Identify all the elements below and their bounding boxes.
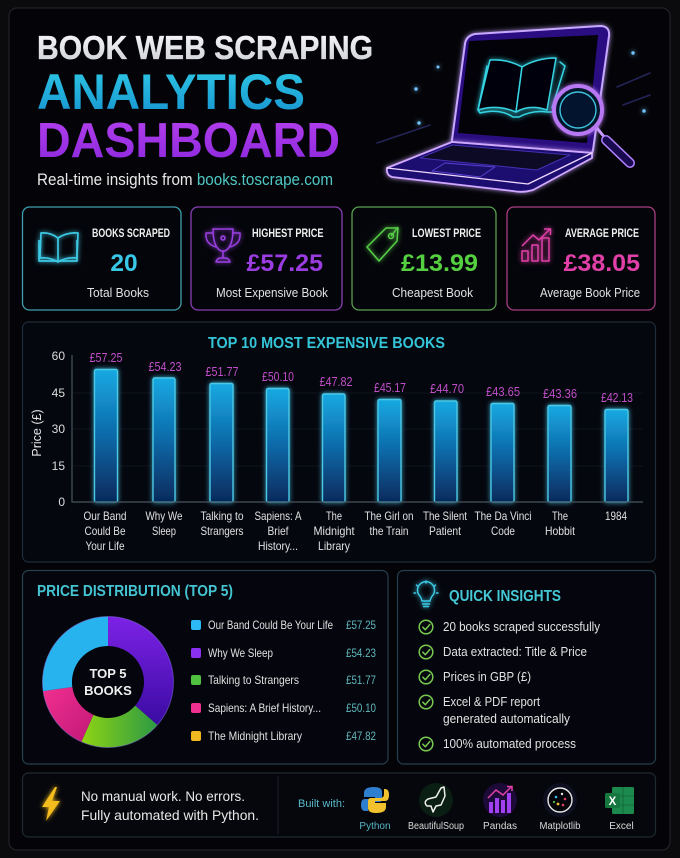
legend: The Midnight Library: [208, 729, 302, 743]
icon: price tag: [367, 227, 398, 261]
built with label: Built with:: [298, 798, 345, 810]
bar value labels: £44.70: [430, 381, 464, 396]
header: [37, 30, 373, 189]
bar category labels: The: [326, 509, 342, 523]
panel: price distribution: [22, 570, 388, 764]
caption: Most Expensive Book: [216, 286, 329, 300]
value: 20: [110, 250, 138, 277]
bar category labels: Midnight: [314, 524, 355, 538]
bar value labels: £43.36: [543, 386, 577, 401]
donut chart: [42, 616, 173, 748]
donut center label: TOP 5: [89, 666, 127, 681]
axis title: Price (£): [30, 409, 44, 457]
bar category labels: The Girl on: [364, 509, 414, 523]
card: average price: [507, 207, 655, 310]
bar category labels: Talking to: [200, 509, 244, 523]
insight list: [443, 620, 601, 751]
label: AVERAGE PRICE: [565, 228, 639, 240]
icon: open book: [39, 233, 78, 262]
bar category labels: Library: [318, 539, 350, 553]
legend: £51.77: [346, 673, 376, 687]
icon: python: [361, 787, 389, 813]
bar category labels: Our Band: [84, 509, 126, 523]
legend: £54.23: [346, 646, 376, 660]
bar category labels: The Silent: [423, 509, 468, 523]
y axis labels: 15: [52, 459, 65, 473]
subtitle: Real-time insights from books.toscrape.com: [37, 171, 333, 189]
insight list: generated automatically: [443, 712, 571, 726]
bar category labels: Sleep: [152, 524, 176, 538]
bar category labels: Brief: [268, 524, 289, 538]
insight list: Data extracted: Title & Price: [443, 645, 587, 659]
icon: excel: [605, 787, 634, 814]
caption: Cheapest Book: [392, 286, 474, 300]
y axis labels: 60: [52, 349, 65, 363]
bar category labels: [84, 509, 627, 553]
label: beautifulsoup: BeautifulSoup: [408, 821, 464, 832]
bar value labels: £50.10: [262, 369, 294, 384]
heading: PRICE DISTRIBUTION (TOP 5): [37, 583, 233, 600]
bar category labels: The: [552, 509, 568, 523]
panel: top 10 bar chart: [22, 322, 656, 562]
insight list: Prices in GBP (£): [443, 670, 531, 684]
y axis labels: 45: [52, 386, 65, 400]
bar value labels: £51.77: [206, 364, 238, 379]
value: £38.05: [564, 250, 640, 277]
label: LOWEST PRICE: [412, 228, 481, 240]
value: £57.25: [246, 250, 323, 277]
y axis labels: 30: [52, 422, 65, 436]
label: python: Python: [359, 821, 391, 832]
card: books scraped: [22, 207, 181, 310]
bar value labels: £42.13: [601, 390, 633, 405]
label: matplotlib: Matplotlib: [540, 821, 581, 832]
label: HIGHEST PRICE: [252, 228, 324, 240]
label: pandas: Pandas: [483, 821, 517, 832]
bar value labels: £45.17: [374, 380, 406, 395]
caption: Average Book Price: [540, 286, 640, 300]
icon: lightning bolt: [42, 787, 60, 821]
bar value labels: £43.65: [486, 384, 520, 399]
legend: [191, 618, 376, 743]
check icons: [419, 620, 433, 751]
bar category labels: the Train: [370, 524, 408, 538]
bar value labels: £57.25: [90, 350, 122, 365]
legend: Sapiens: A Brief History...: [208, 701, 321, 715]
bar value labels: [90, 350, 633, 405]
label: BOOKS SCRAPED: [92, 228, 170, 240]
bar category labels: History...: [258, 539, 298, 553]
icon: light bulb: [414, 581, 438, 606]
legend: £57.25: [346, 618, 376, 632]
chart title: TOP 10 MOST EXPENSIVE BOOKS: [208, 335, 445, 352]
legend: Why We Sleep: [208, 646, 273, 660]
footer message: [81, 788, 259, 823]
legend: £47.82: [346, 729, 376, 743]
bar category labels: The Da Vinci: [474, 509, 532, 523]
icon: excel: X: [609, 796, 617, 808]
card: lowest price: [352, 207, 496, 310]
icon: rising chart: [522, 229, 550, 261]
card: highest price: [191, 207, 342, 310]
bar category labels: Sapiens: A: [254, 509, 302, 523]
footer message: Fully automated with Python.: [81, 807, 259, 823]
icon: neon laptop with book and magnifier: [377, 26, 650, 192]
icon: trophy: [206, 229, 240, 262]
panel: quick insights: [398, 570, 656, 764]
icon: beautifulsoup: [419, 783, 453, 817]
value: £13.99: [401, 250, 478, 277]
bar category labels: Could Be: [84, 524, 126, 538]
insight list: 20 books scraped successfully: [443, 620, 601, 634]
footer message: No manual work. No errors.: [81, 788, 245, 804]
bar category labels: Your Life: [86, 539, 125, 553]
donut center label: BOOKS: [84, 683, 132, 698]
legend: £50.10: [346, 701, 376, 715]
bar category labels: Why We: [146, 509, 183, 523]
bar category labels: Hobbit: [545, 524, 576, 538]
bar value labels: £54.23: [148, 359, 182, 374]
bar value labels: £47.82: [320, 374, 352, 389]
icon: pandas: [483, 783, 517, 817]
insight list: 100% automated process: [443, 737, 576, 751]
label: excel: Excel: [609, 821, 634, 832]
panel: footer: [22, 773, 656, 837]
title line: dashboard: DASHBOARD: [37, 114, 340, 168]
legend: Talking to Strangers: [208, 673, 299, 687]
bars: [94, 370, 628, 502]
bar category labels: Code: [491, 524, 515, 538]
insight list: Excel & PDF report: [443, 695, 540, 709]
title line: analytics: ANALYTICS: [37, 64, 305, 120]
y axis labels: [52, 349, 65, 509]
caption: Total Books: [87, 286, 149, 300]
panel: KPI cards: [22, 207, 655, 310]
bar category labels: Strangers: [200, 524, 244, 538]
y axis labels: 0: [58, 495, 65, 509]
bar category labels: Patient: [429, 524, 462, 538]
icon: matplotlib: [543, 783, 577, 817]
legend: Our Band Could Be Your Life: [208, 618, 333, 632]
bar category labels: 1984: [605, 509, 627, 523]
heading: QUICK INSIGHTS: [449, 588, 561, 605]
title line: book web scraping: BOOK WEB SCRAPING: [37, 30, 373, 67]
